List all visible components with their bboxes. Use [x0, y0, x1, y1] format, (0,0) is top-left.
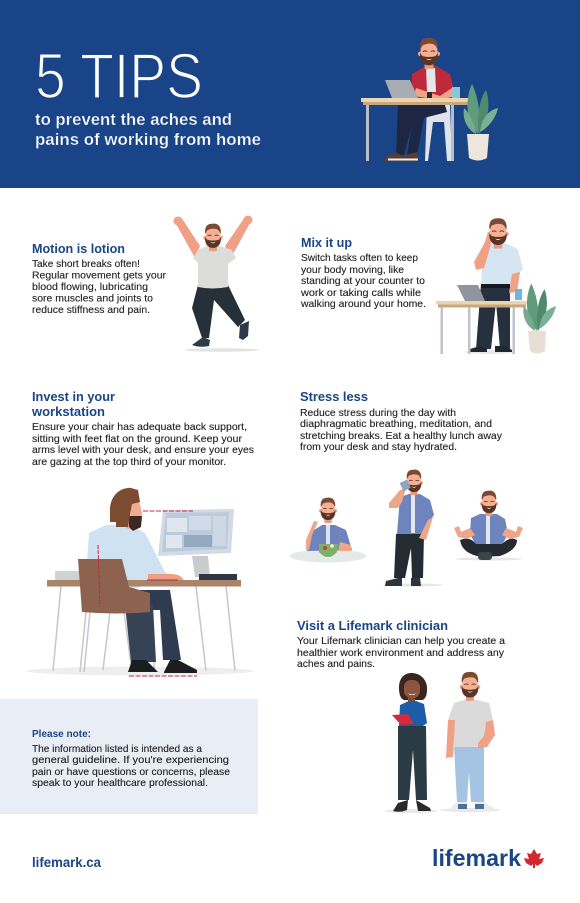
header banner: [0, 0, 580, 188]
note text: [32, 744, 230, 789]
subtitle: [35, 111, 261, 149]
illustration: man at desk: [361, 38, 498, 161]
heading: Motion is lotion: [32, 241, 125, 256]
illustration: man drinking water: [383, 470, 443, 586]
body text: [300, 253, 426, 310]
illustration: jumping man: [174, 216, 259, 352]
body text: [297, 636, 505, 670]
subtitle: to prevent the aches and: [35, 111, 232, 129]
note text: The information listed is intended as a: [32, 744, 202, 755]
panel: motion is lotion: [32, 216, 259, 352]
website link: lifemark.ca: [32, 854, 101, 870]
body text: are gazing at the top third of your monitor.: [32, 457, 226, 468]
body text: aches and pains.: [297, 659, 375, 670]
body text: healthier work environment and address any: [297, 648, 505, 659]
title: 5 TIPS: [35, 40, 203, 112]
icon: maple leaf: [524, 849, 544, 868]
alignment guides: [98, 511, 197, 676]
body text: sitting with feet flat on the ground. Keep your: [32, 434, 243, 445]
illustration: patient: [440, 672, 500, 812]
illustration: man eating salad: [290, 498, 366, 562]
body text: arms level with your desk, and ensure your eyes: [32, 445, 254, 456]
logo: lifemark: lifemark: [432, 845, 521, 871]
panel: invest in your workstation: [27, 389, 254, 676]
heading: Invest in your: [32, 389, 115, 404]
body text: sore muscles and joints to: [32, 294, 153, 304]
body text: [300, 408, 503, 453]
body text: Reduce stress during the day with: [300, 408, 456, 419]
body text: reduce stiffness and pain.: [32, 305, 150, 316]
body text: standing at your counter to: [301, 276, 425, 287]
body text: Take short breaks often!: [32, 259, 140, 270]
body text: from your desk and stay hydrated.: [300, 442, 457, 453]
body text: work or taking calls while: [300, 288, 421, 299]
illustration: man on phone at desk: [436, 218, 556, 354]
subtitle: pains of working from home: [35, 131, 261, 149]
panel: stress less: [290, 389, 523, 586]
heading: workstation: [31, 404, 105, 419]
body text: diaphragmatic breathing, meditation, and: [300, 419, 492, 430]
body text: Regular movement gets your: [32, 270, 167, 282]
panel: mix it up: [300, 218, 556, 354]
body text: blood flowing, lubricating: [32, 282, 148, 293]
note text: general guideline. If you're experiencing: [32, 755, 229, 766]
heading: [31, 389, 115, 419]
body text: Ensure your chair has adequate back support,: [32, 422, 247, 433]
illustration: man at ergonomic workstation: [27, 488, 253, 676]
note text: speak to your healthcare professional.: [32, 778, 208, 789]
body text: your body moving, like: [301, 265, 404, 276]
panel: please note: [0, 699, 258, 814]
note heading: Please note:: [32, 729, 91, 740]
heading: Mix it up: [301, 235, 352, 250]
illustration: man meditating: [454, 491, 523, 560]
illustration: clinician: [385, 673, 437, 813]
note text: pain or have questions or concerns, please: [32, 767, 230, 778]
body text: Your Lifemark clinician can help you create a: [297, 636, 505, 647]
body text: walking around your home.: [300, 299, 426, 310]
body text: stretching breaks. Eat a healthy lunch away: [300, 431, 503, 442]
body text: [32, 422, 254, 468]
heading: Stress less: [300, 389, 368, 404]
heading: Visit a Lifemark clinician: [297, 618, 448, 633]
body text: Switch tasks often to keep: [301, 253, 418, 264]
panel: visit a lifemark clinician: [297, 618, 505, 813]
body text: [32, 259, 167, 316]
